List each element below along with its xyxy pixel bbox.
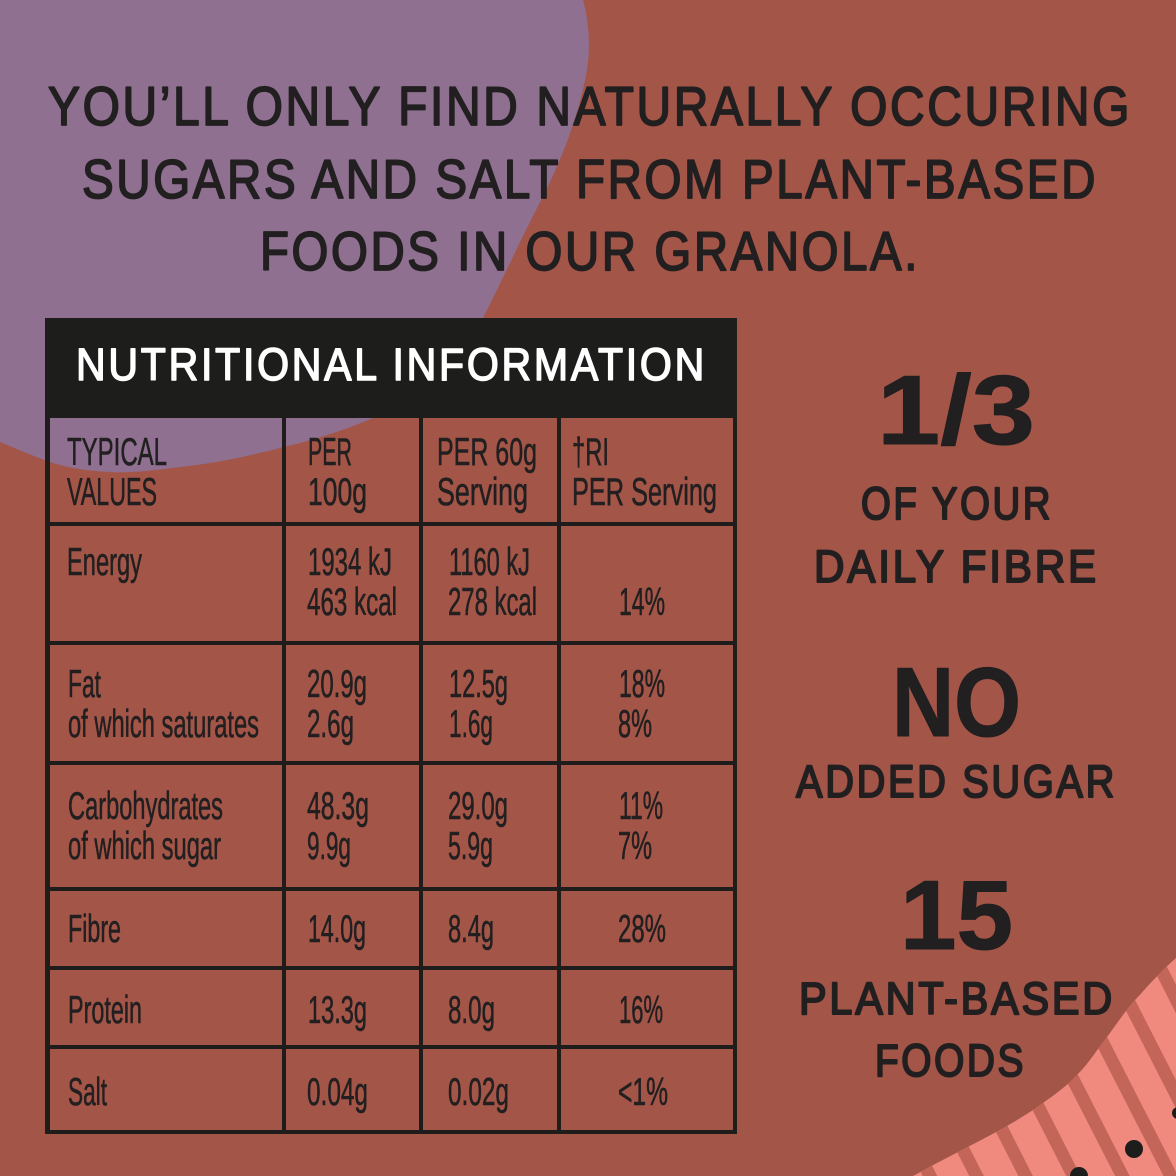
row: carbohydrates: 5.9g <box>448 825 493 868</box>
callout: one third daily fibre: DAILY FIBRE <box>814 541 1099 592</box>
row: energy: 1934 kJ <box>308 541 392 584</box>
row: protein: 8.0g <box>448 989 495 1032</box>
row: carbohydrates <box>68 785 663 868</box>
column headings: PER 60g <box>437 431 537 474</box>
row: salt: Salt <box>68 1071 107 1114</box>
row: fibre: 28% <box>618 908 666 951</box>
table header bar: NUTRITIONAL INFORMATION <box>76 339 707 390</box>
row: fat: 1.6g <box>449 703 493 746</box>
column headings: TYPICAL <box>67 431 167 474</box>
row: energy <box>67 541 665 624</box>
row: energy: Energy <box>67 541 142 584</box>
row: fat: 20.9g <box>307 663 367 706</box>
callout: 15 plant-based foods: PLANT-BASED <box>799 973 1115 1024</box>
column headings: PER Serving <box>572 471 717 514</box>
row: salt <box>68 1071 668 1114</box>
row: energy: 14% <box>619 581 665 624</box>
row: carbohydrates: 7% <box>618 825 652 868</box>
row: fat: of which saturates <box>68 703 259 746</box>
row: protein <box>68 989 663 1032</box>
title: FOODS IN OUR GRANOLA. <box>260 220 920 282</box>
callout: one third daily fibre: 1/3 <box>877 355 1035 465</box>
callout: no added sugar: ADDED SUGAR <box>796 756 1117 807</box>
row: fat: 2.6g <box>307 703 354 746</box>
row: salt: <1% <box>618 1071 668 1114</box>
table grid <box>45 318 737 1134</box>
row: protein: Protein <box>68 989 142 1032</box>
row: protein: 16% <box>619 989 663 1032</box>
row: energy: 278 kcal <box>448 581 537 624</box>
row: fat: 18% <box>619 663 665 706</box>
column headings: PER <box>308 431 352 474</box>
nutrition table <box>45 318 737 1134</box>
row: carbohydrates: 48.3g <box>307 785 369 828</box>
row: fat <box>68 663 665 746</box>
callout: 15 plant-based foods: 15 <box>900 860 1013 970</box>
purple blob <box>0 0 589 472</box>
row: carbohydrates: 9.9g <box>307 825 351 868</box>
table header bar <box>45 318 737 418</box>
row: fat: 12.5g <box>449 663 508 706</box>
callout: 15 plant-based foods <box>799 860 1115 1086</box>
row: fibre <box>68 908 666 951</box>
column headings: Serving <box>437 471 528 514</box>
row: protein: 13.3g <box>308 989 367 1032</box>
row: fibre: 8.4g <box>448 908 494 951</box>
row: salt: 0.02g <box>448 1071 509 1114</box>
callout: 15 plant-based foods: FOODS <box>875 1035 1026 1086</box>
row: carbohydrates: Carbohydrates <box>68 785 223 828</box>
row: fat: 8% <box>618 703 652 746</box>
callout: no added sugar: NO <box>892 647 1021 757</box>
column headings: 100g <box>308 471 367 514</box>
row: energy: 463 kcal <box>307 581 397 624</box>
row: energy: 1160 kJ <box>449 541 530 584</box>
pink striped blob <box>913 958 1176 1176</box>
row: fibre: Fibre <box>68 908 121 951</box>
column headings: VALUES <box>67 471 157 514</box>
column headings: †RI <box>572 431 609 474</box>
title <box>48 75 1132 282</box>
callout: one third daily fibre <box>814 355 1099 592</box>
row: fat: Fat <box>68 663 101 706</box>
callout: one third daily fibre: OF YOUR <box>861 478 1053 529</box>
row: carbohydrates: of which sugar <box>68 825 221 868</box>
callout: no added sugar <box>796 647 1117 807</box>
row: carbohydrates: 11% <box>619 785 663 828</box>
row: salt: 0.04g <box>307 1071 368 1114</box>
row: carbohydrates: 29.0g <box>448 785 508 828</box>
row: fibre: 14.0g <box>308 908 366 951</box>
column headings <box>67 431 717 514</box>
